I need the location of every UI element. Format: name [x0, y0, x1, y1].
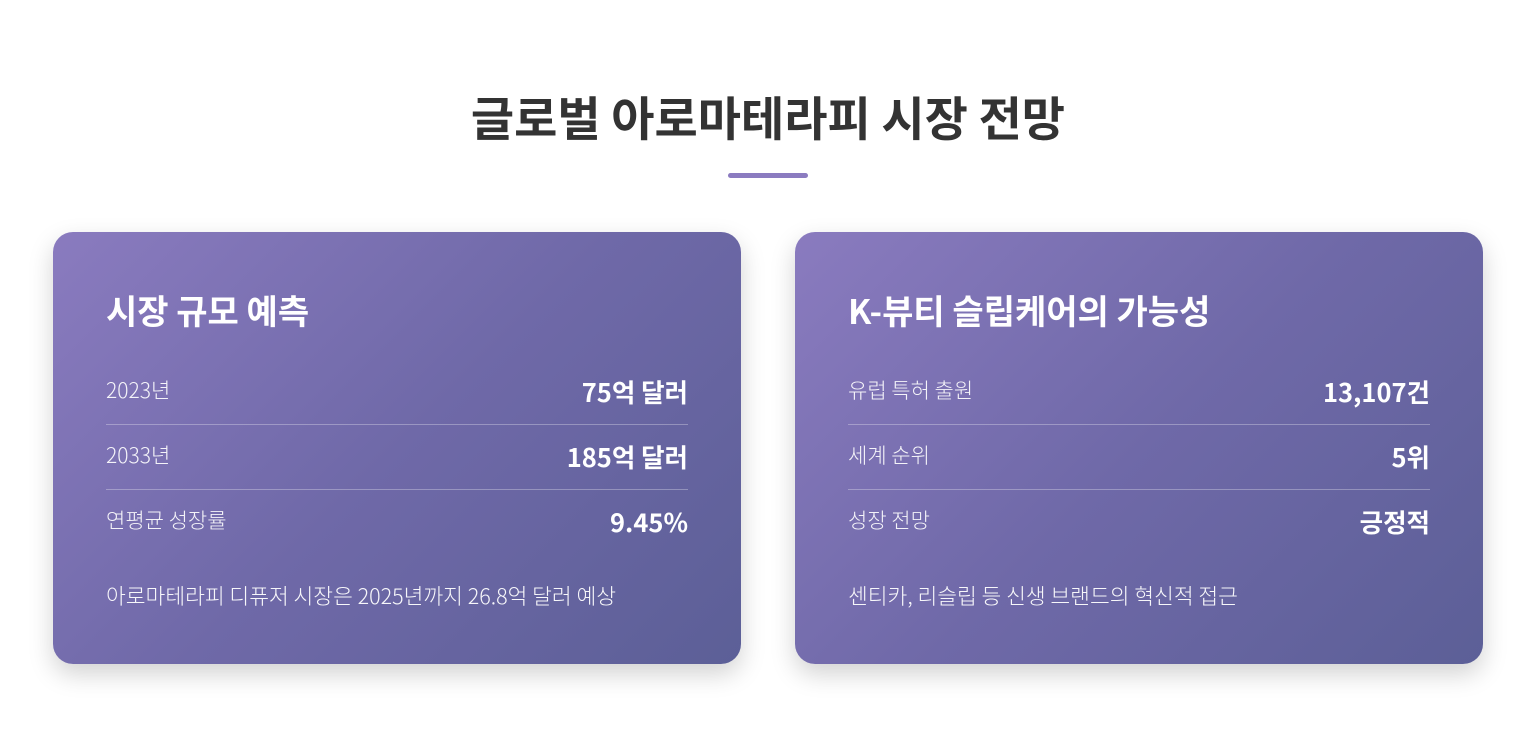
row: patents: 13,107건 — [1323, 372, 1430, 410]
row: ranking — [848, 424, 1430, 490]
row: patents: 유럽 특허 출원 — [848, 374, 973, 404]
row: ranking: 세계 순위 — [848, 440, 930, 470]
row: 2023: 2023년 — [106, 374, 170, 404]
row: 2033: 185억 달러 — [567, 438, 688, 474]
row: CAGR: 9.45% — [610, 502, 688, 540]
row: 2033: 2033년 — [106, 440, 170, 470]
row: patents — [848, 359, 1430, 425]
title: 글로벌 아로마테라피 시장 전망 — [471, 81, 1065, 150]
row: CAGR — [106, 502, 688, 540]
title underline — [728, 173, 808, 178]
row: 2023: 75억 달러 — [582, 372, 688, 410]
row: CAGR: 연평균 성장률 — [106, 504, 227, 534]
panel heading: 시장 규모 예측 — [106, 285, 309, 334]
row: 2033 — [106, 424, 688, 490]
row: ranking: 5위 — [1391, 438, 1430, 474]
row: outlook — [848, 502, 1430, 540]
panel: K-beauty sleep care — [795, 232, 1483, 664]
note: 센티카, 리슬립 등 신생 브랜드의 혁신적 접근 — [848, 580, 1238, 611]
row: outlook: 긍정적 — [1360, 502, 1430, 540]
panel heading: K-뷰티 슬립케어의 가능성 — [848, 285, 1210, 334]
row: 2023 — [106, 359, 688, 425]
note: 아로마테라피 디퓨저 시장은 2025년까지 26.8억 달러 예상 — [106, 580, 616, 611]
row: outlook: 성장 전망 — [848, 504, 930, 534]
panel: market size forecast — [53, 232, 741, 664]
